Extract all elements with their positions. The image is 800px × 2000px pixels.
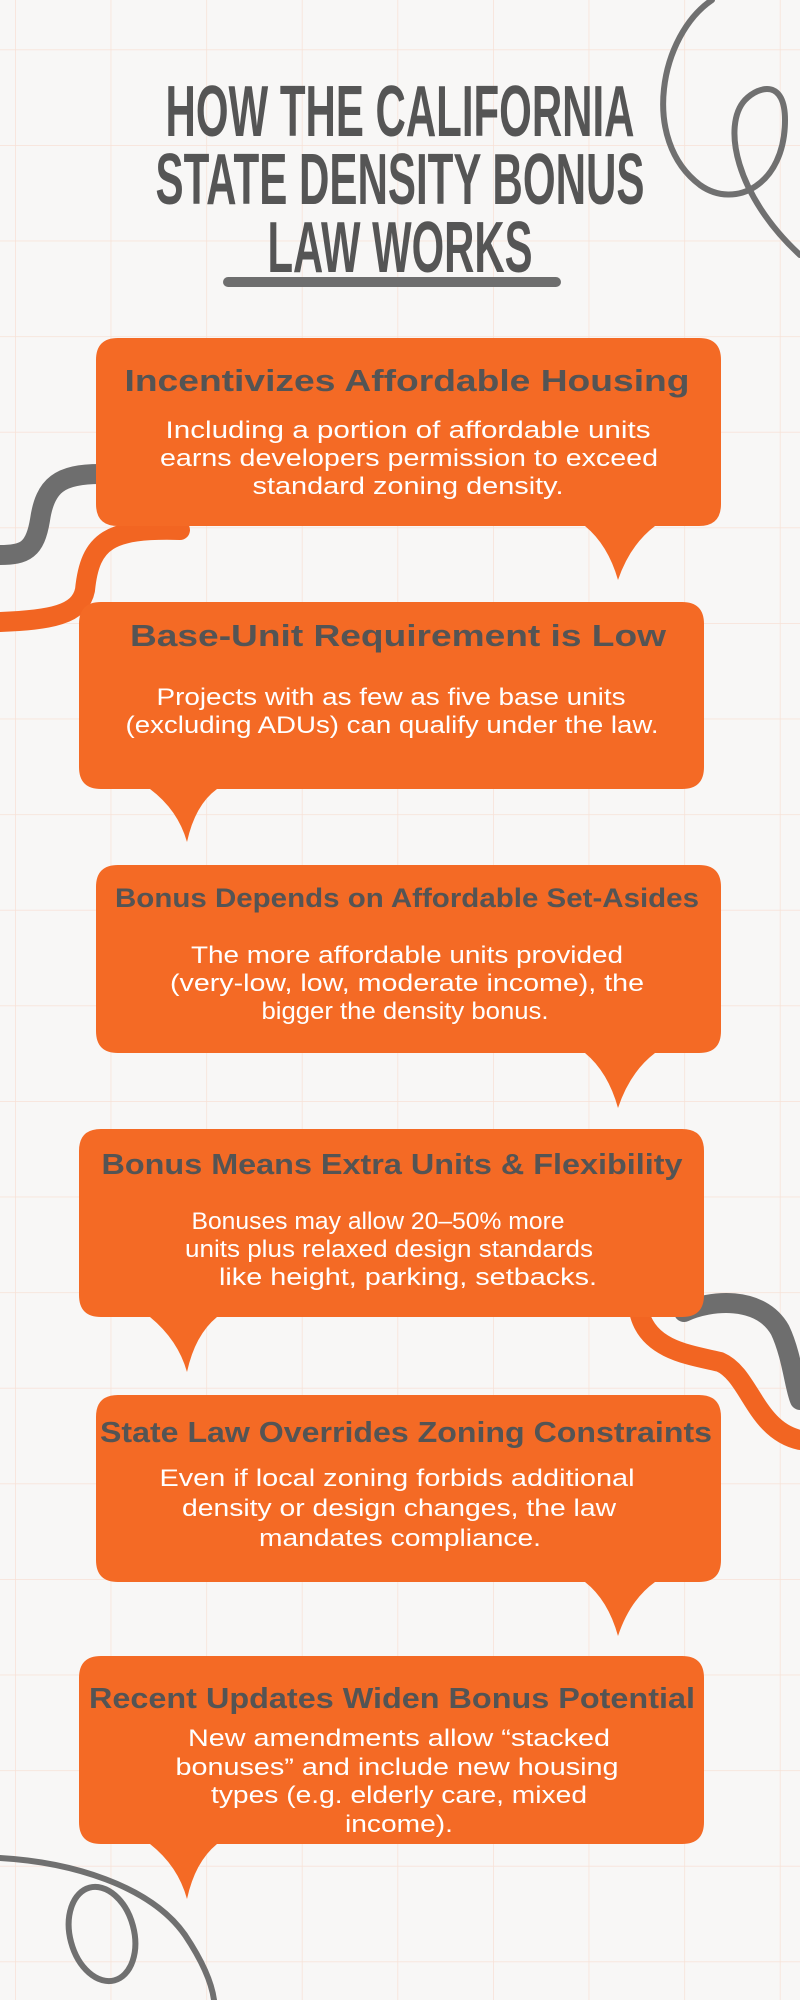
text block	[170, 942, 644, 1025]
decoration: bottom-left loop	[0, 1858, 214, 2000]
text block: (excluding ADUs) can qualify under the law.	[126, 712, 658, 739]
text block	[176, 1725, 618, 1838]
text block: mandates compliance.	[259, 1525, 541, 1552]
text block: Bonuses may allow 20–50% more	[192, 1208, 564, 1235]
text block: Including a portion of affordable units	[166, 417, 650, 444]
text block: earns developers permission to exceed	[160, 445, 658, 472]
panel: bonus depends on set-asides	[96, 865, 721, 1108]
heading: Recent Updates Widen Bonus Potential	[89, 1683, 695, 1715]
title	[156, 72, 644, 288]
text block: like height, parking, setbacks.	[219, 1264, 597, 1291]
text block	[185, 1208, 597, 1291]
text block: standard zoning density.	[252, 473, 564, 500]
decoration: top-right loops	[663, 0, 800, 255]
text block: bigger the density bonus.	[262, 998, 548, 1025]
text block	[160, 417, 658, 500]
text block: income).	[345, 1811, 453, 1838]
text block: bonuses” and include new housing	[176, 1754, 618, 1781]
decoration: left bands	[0, 474, 180, 622]
heading: Base-Unit Requirement is Low	[130, 618, 667, 653]
text block: density or design changes, the law	[182, 1495, 617, 1522]
text block: The more affordable units provided	[191, 942, 623, 969]
heading: Bonus Depends on Affordable Set-Asides	[115, 883, 699, 913]
text block: units plus relaxed design standards	[185, 1236, 593, 1263]
panel: incentivizes affordable housing	[96, 338, 721, 580]
heading: State Law Overrides Zoning Constraints	[100, 1417, 712, 1449]
panel: recent updates	[79, 1656, 704, 1899]
title: LAW WORKS	[268, 208, 532, 288]
panel: extra units and flexibility	[79, 1129, 704, 1372]
text block	[160, 1465, 634, 1552]
heading: Bonus Means Extra Units & Flexibility	[102, 1149, 682, 1181]
text block: types (e.g. elderly care, mixed	[211, 1782, 587, 1809]
panel: base-unit requirement	[79, 602, 704, 842]
text block: Even if local zoning forbids additional	[160, 1465, 634, 1492]
text block: New amendments allow “stacked	[188, 1725, 610, 1752]
panel: state law overrides zoning	[96, 1395, 721, 1636]
heading: Incentivizes Affordable Housing	[124, 363, 690, 398]
text block	[126, 684, 658, 739]
text block: Projects with as few as five base units	[156, 684, 626, 711]
decoration: right bands	[640, 1303, 800, 1440]
text block: (very-low, low, moderate income), the	[170, 970, 644, 997]
